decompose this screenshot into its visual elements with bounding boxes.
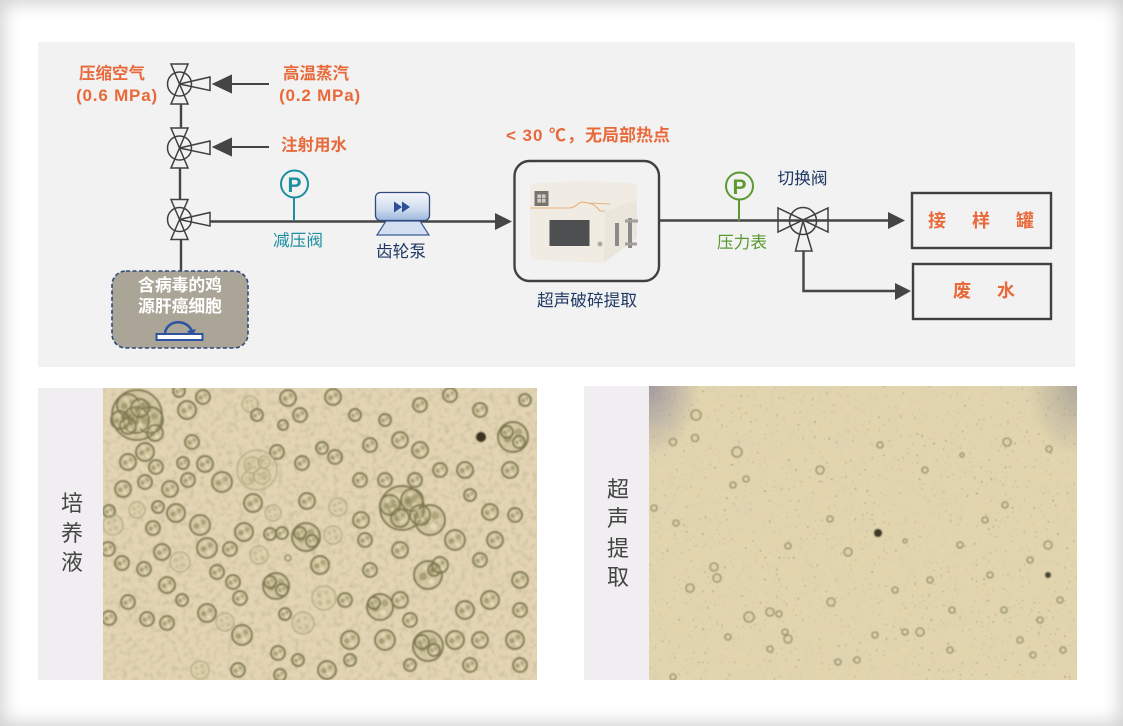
icon: injection water valve xyxy=(168,128,210,168)
label: high temperature steam: 高温蒸汽 xyxy=(283,63,350,83)
label: culture medium xyxy=(38,388,103,680)
sample tank box: 接 xyxy=(928,211,946,231)
pipes on the supply manifold xyxy=(180,104,181,271)
panel: ultrasonic extraction micrograph xyxy=(584,386,1077,680)
photo: cells before extraction xyxy=(101,385,537,681)
label: temperature note: 无局部热点 xyxy=(585,125,670,145)
label: temperature note: < 30 ℃， xyxy=(506,126,584,145)
label: switching valve: 切换阀 xyxy=(777,169,828,188)
photo: debris after extraction xyxy=(649,386,1077,680)
waste water box xyxy=(913,264,1051,319)
sample container: 源肝癌细胞 xyxy=(138,296,222,316)
arrow: water inlet xyxy=(214,139,269,155)
label: ultrasonic extraction: 提 xyxy=(607,536,629,561)
icon: compressed air valve xyxy=(168,64,210,104)
label: culture medium: 培 xyxy=(61,491,83,516)
icon: switching valve xyxy=(778,208,828,251)
outlet pipe with arrow xyxy=(659,219,890,222)
arrow: steam inlet xyxy=(214,76,269,92)
sample tank box: 罐 xyxy=(1016,211,1034,231)
label: culture medium: 养 xyxy=(61,521,83,546)
waste water box: 废 xyxy=(953,280,971,301)
label: compressed air: 压缩空气 xyxy=(79,63,146,83)
icon: gear pump xyxy=(376,192,430,235)
label: ultrasonic extraction xyxy=(584,386,649,680)
ultrasonic extractor device box xyxy=(514,161,659,281)
pressure reducing valve gauge: P xyxy=(287,174,302,197)
pressure reducing valve gauge xyxy=(281,170,308,221)
sample tank box: 样 xyxy=(972,211,990,231)
label: high temperature steam xyxy=(279,63,361,105)
label: culture medium: 液 xyxy=(61,550,83,575)
sample container: 含病毒的鸡 xyxy=(138,275,222,295)
label: ultrasonic extraction: 声 xyxy=(607,506,629,531)
label: compressed air: (0.6 MPa) xyxy=(76,86,158,105)
label: ultrasonic extraction: 超声破碎提取 xyxy=(537,291,637,310)
main pipe with arrow into extractor xyxy=(210,220,497,223)
pressure gauge xyxy=(726,172,753,221)
waste water box: 水 xyxy=(997,281,1015,301)
pressure gauge: P xyxy=(732,176,747,199)
label: ultrasonic extraction: 超 xyxy=(607,477,629,502)
sample tank box xyxy=(912,193,1051,248)
label: compressed air xyxy=(76,63,158,105)
icon: outlet valve xyxy=(168,200,210,240)
waste pipe with arrow xyxy=(804,251,897,291)
sample container xyxy=(112,271,248,348)
label: injection water: 注射用水 xyxy=(281,134,348,154)
label: gear pump: 齿轮泵 xyxy=(376,242,426,261)
label: ultrasonic extraction: 取 xyxy=(607,565,629,590)
label: pressure reducing valve: 减压阀 xyxy=(273,231,323,250)
label: pressure gauge: 压力表 xyxy=(717,233,767,252)
panel: culture medium micrograph xyxy=(38,385,537,681)
panel: process flow diagram xyxy=(38,42,1075,367)
label: high temperature steam: (0.2 MPa) xyxy=(279,86,361,105)
